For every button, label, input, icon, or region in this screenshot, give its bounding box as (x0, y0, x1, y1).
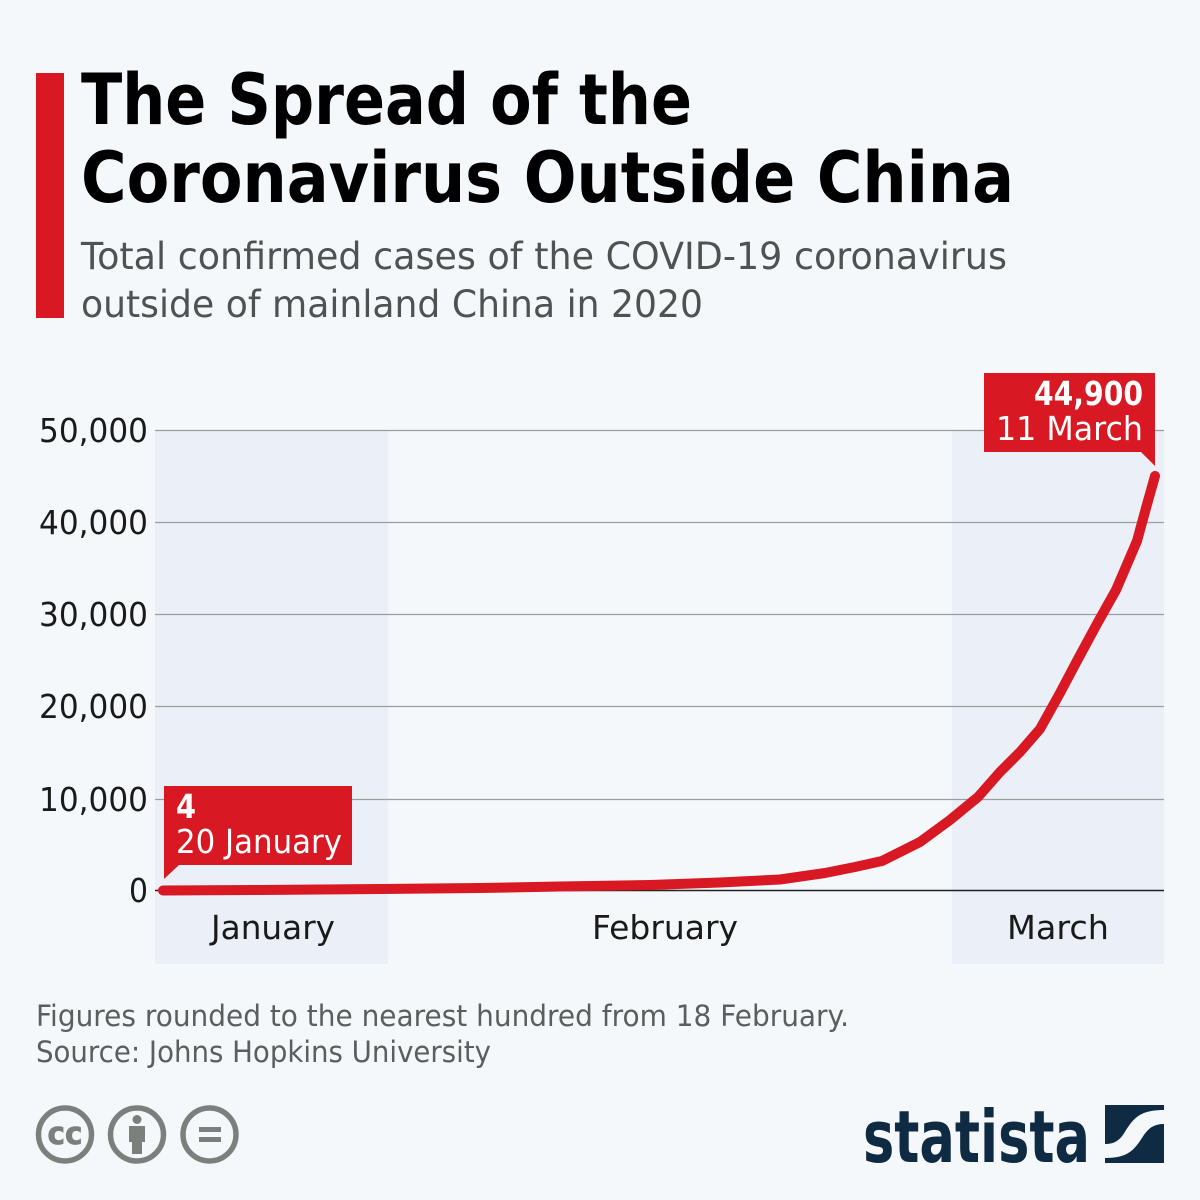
y axis labels: 50,000 (39, 411, 148, 450)
chart: month bands (155, 430, 1164, 964)
title: Coronavirus Outside China (81, 137, 1014, 219)
icon: attribution (110, 1108, 164, 1161)
subtitle: outside of mainland China in 2020 (81, 283, 703, 326)
footnote and source: Source: Johns Hopkins University (36, 1035, 491, 1069)
y axis labels: 30,000 (39, 595, 148, 634)
footnote and source: Figures rounded to the nearest hundred from 18 February. (36, 999, 849, 1033)
icon: no derivatives (183, 1108, 236, 1161)
y axis labels (39, 411, 148, 910)
x axis month labels: January (209, 908, 335, 947)
icon: creative commons: cc (48, 1116, 82, 1152)
callout: 20 January: 4 (176, 787, 196, 826)
title (81, 59, 1014, 219)
callout: 11 March: 44,900 (1034, 374, 1143, 413)
icon: creative commons (38, 1108, 92, 1161)
y axis labels: 20,000 (39, 687, 148, 726)
callout: 11 March (984, 373, 1155, 466)
red accent bar (36, 73, 64, 318)
subtitle (80, 235, 1007, 326)
x axis month labels: March (1007, 908, 1109, 947)
footnote and source (36, 999, 849, 1069)
line: total confirmed cases (163, 476, 1155, 890)
subtitle: Total confirmed cases of the COVID-19 coronavirus (80, 235, 1007, 278)
y axis labels: 0 (129, 871, 148, 910)
y axis labels: 10,000 (39, 780, 148, 819)
callout: 20 January (164, 786, 352, 879)
logo: statista: statista (863, 1095, 1090, 1179)
logo mark (1105, 1105, 1164, 1163)
title: The Spread of the (81, 59, 692, 141)
callout: 11 March: 11 March (996, 409, 1143, 448)
y axis labels: 40,000 (39, 503, 148, 542)
x axis month labels (209, 908, 1109, 947)
callout: 20 January: 20 January (176, 822, 342, 861)
x axis month labels: February (592, 908, 738, 947)
